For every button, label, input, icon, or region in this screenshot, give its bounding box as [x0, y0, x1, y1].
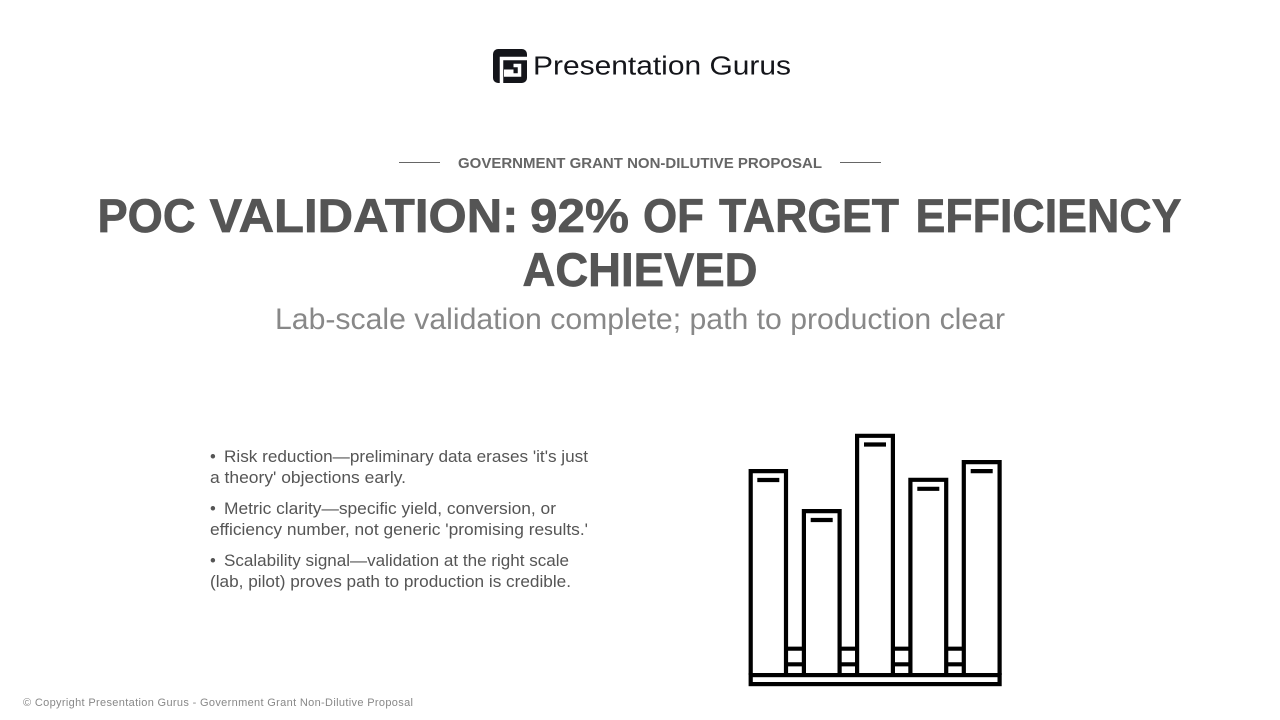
title — [98, 190, 1182, 297]
title: 92% — [530, 190, 629, 243]
bullet: metric clarity — [210, 500, 588, 539]
subtitle: Lab-scale validation complete; path to production clear — [275, 303, 1005, 336]
title: ACHIEVED — [522, 244, 758, 297]
title: OF — [643, 190, 704, 243]
bullet: metric clarity: Metric clarity—specific yield, conversion, or — [224, 500, 557, 518]
icon: logo mark — [493, 49, 527, 83]
title: EFFICIENCY — [916, 190, 1182, 243]
bullet: risk reduction: a theory' objections early. — [210, 469, 406, 487]
bullet: scalability signal: Scalability signal—validation at the right scale — [224, 552, 569, 570]
bullet: metric clarity: efficiency number, not generic 'promising results.' — [210, 521, 588, 539]
bullet: scalability signal — [210, 552, 571, 591]
bullet: scalability signal: • — [210, 552, 216, 570]
title: VALIDATION: — [210, 190, 518, 243]
bullet: risk reduction: • — [210, 448, 216, 466]
logo wordmark: Presentation Gurus — [533, 52, 791, 80]
title: TARGET — [719, 190, 899, 243]
bullet: metric clarity: • — [210, 500, 216, 518]
bullet: scalability signal: (lab, pilot) proves path to production is credible. — [210, 573, 571, 591]
bullet: risk reduction: Risk reduction—preliminary data erases 'it's just — [224, 448, 588, 466]
eyebrow heading: GOVERNMENT GRANT NON-DILUTIVE PROPOSAL — [458, 155, 822, 172]
icon: bar chart — [751, 436, 1000, 684]
logo: Presentation Gurus — [493, 49, 791, 83]
title: POC — [98, 190, 196, 243]
bullet list — [210, 448, 588, 591]
footer copyright: © Copyright Presentation Gurus - Government Grant Non-Dilutive Proposal — [23, 697, 413, 709]
bullet: risk reduction — [210, 448, 588, 487]
